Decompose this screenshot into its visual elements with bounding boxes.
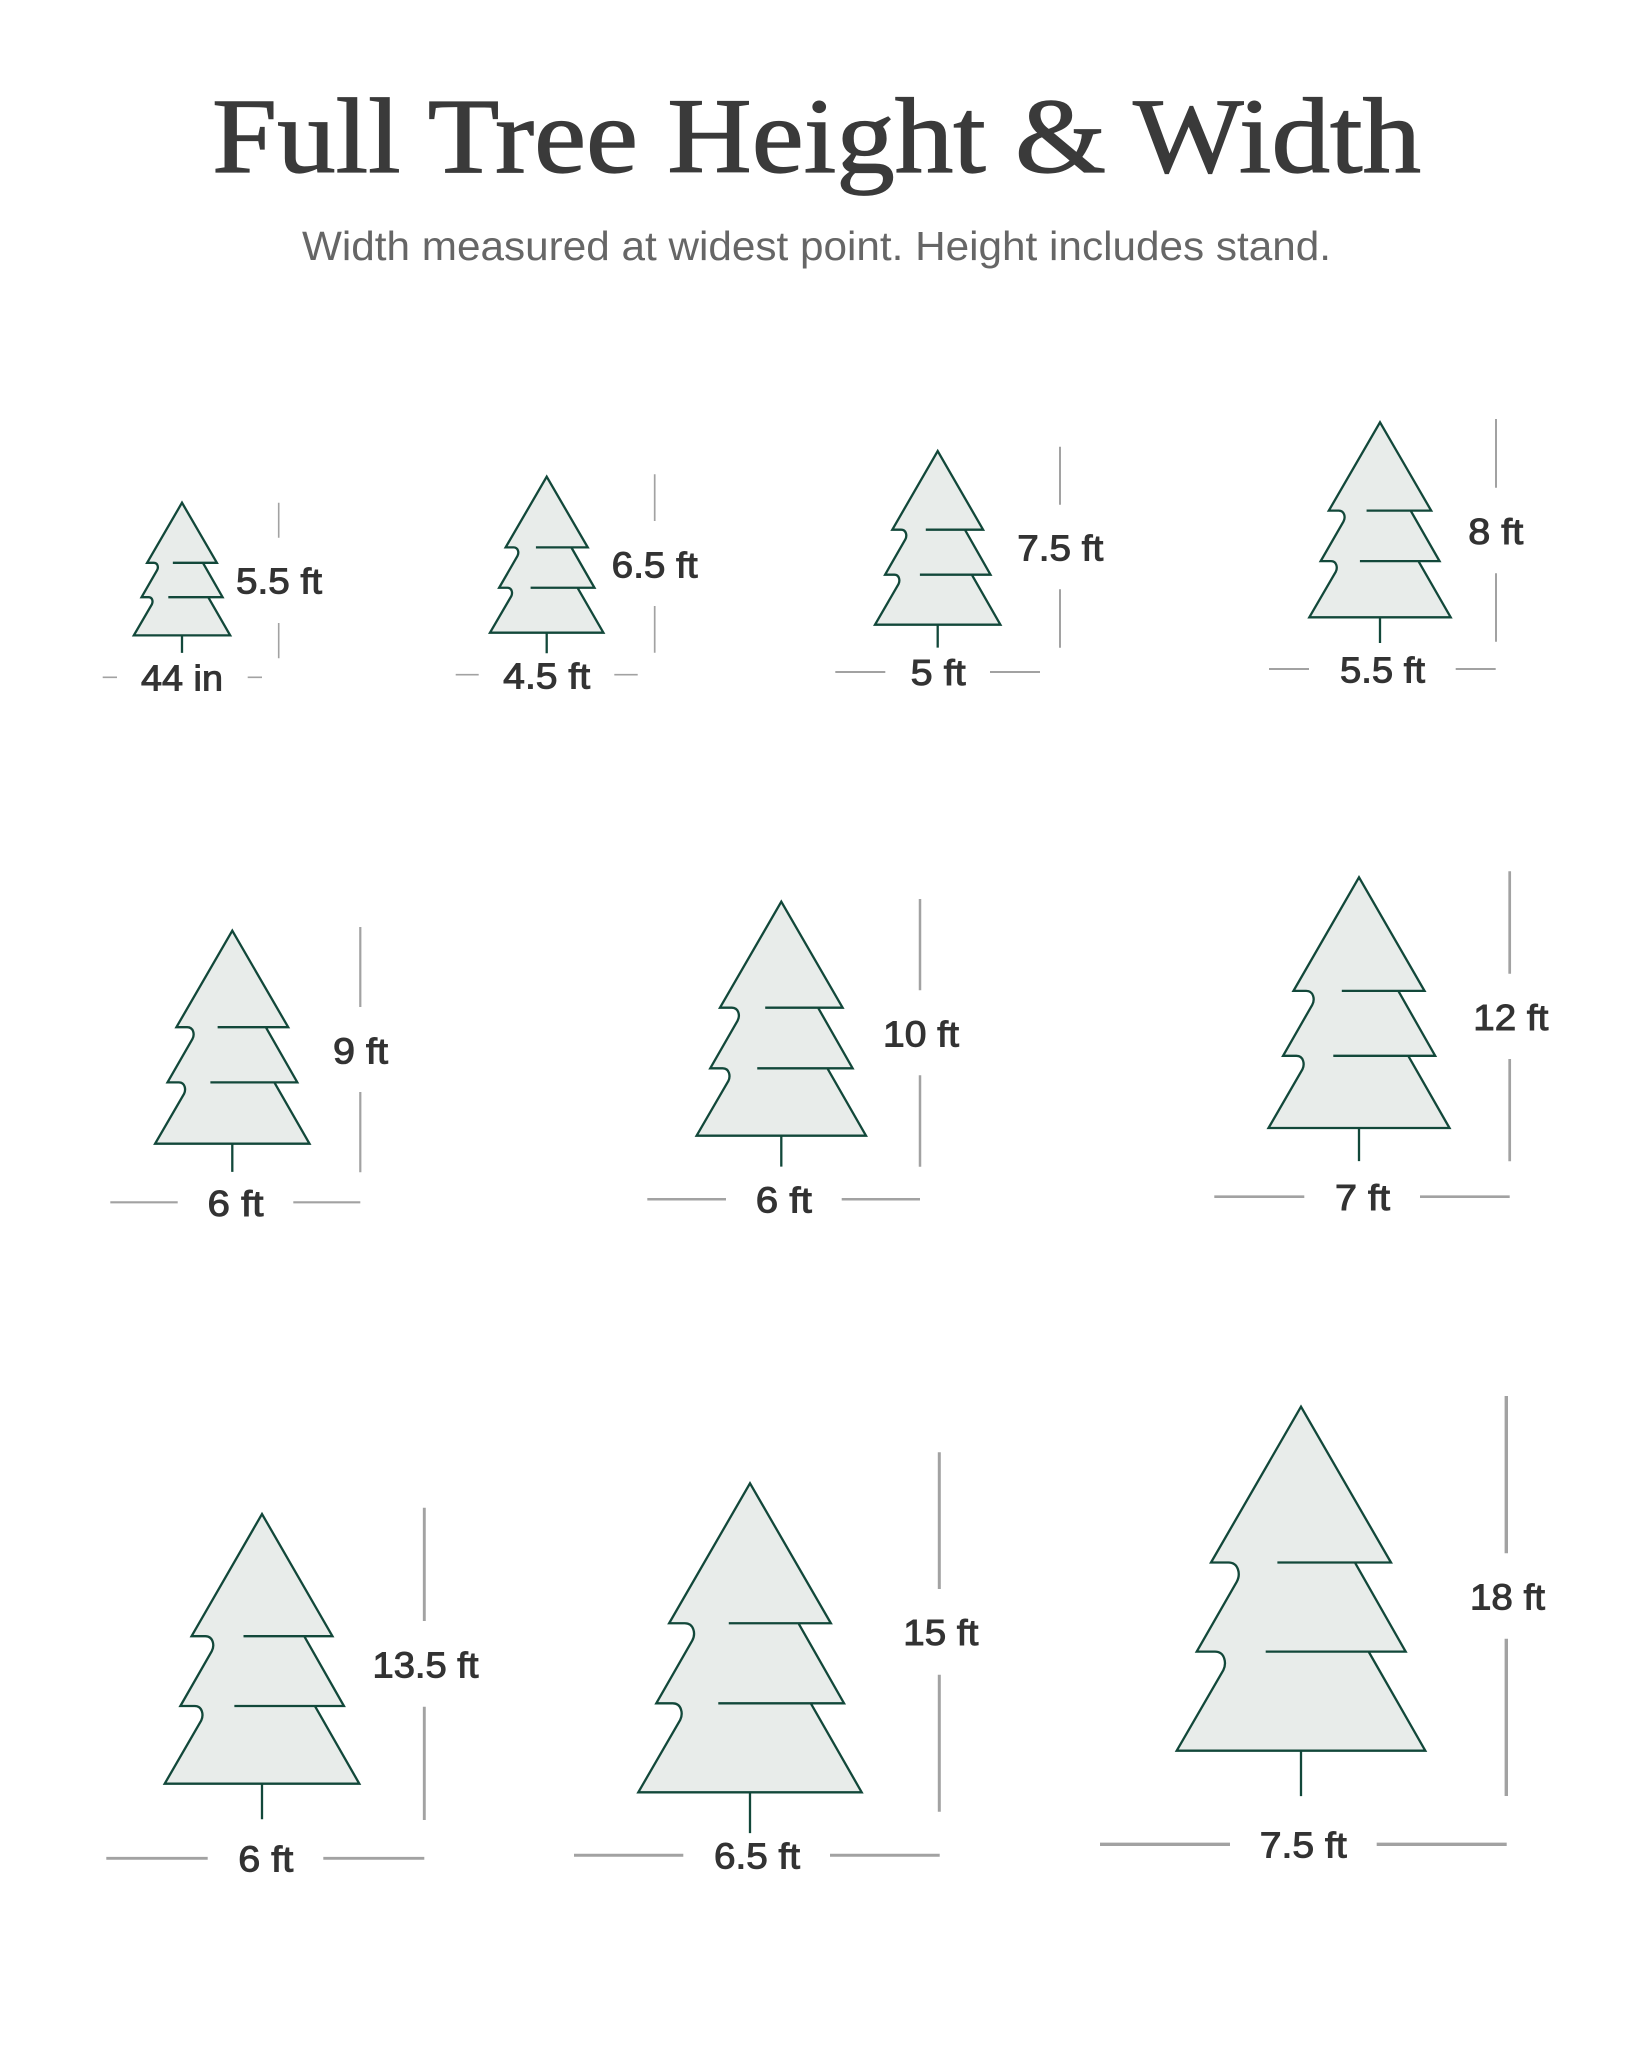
width line — [1214, 1195, 1510, 1198]
icon: tree — [697, 902, 866, 1167]
height label: 6.5 ft — [612, 544, 698, 585]
height line — [278, 503, 280, 658]
height line — [1505, 1396, 1508, 1796]
subtitle: Width measured at widest point. Height includes stand. — [302, 223, 1331, 269]
height line — [938, 1452, 941, 1812]
width label: 6 ft — [208, 1183, 264, 1224]
panel: tree 10 ft by 6 ft — [647, 899, 959, 1220]
height label: 10 ft — [883, 1014, 959, 1055]
height label: 9 ft — [333, 1030, 388, 1071]
width label: 6.5 ft — [714, 1835, 800, 1876]
icon: tree — [155, 931, 310, 1172]
icon: tree — [165, 1514, 359, 1819]
panel: tree 6.5 ft by 4.5 ft — [456, 474, 698, 696]
icon: tree — [875, 451, 1000, 648]
icon: tree — [1309, 422, 1451, 643]
width label: 44 in — [141, 658, 223, 699]
width line — [574, 1854, 940, 1857]
width label: 6 ft — [756, 1179, 812, 1220]
height line — [1495, 419, 1497, 642]
height line — [1508, 871, 1511, 1161]
width line — [103, 676, 262, 678]
width label: 5.5 ft — [1340, 650, 1425, 691]
icon: tree — [490, 477, 603, 653]
width line — [647, 1198, 920, 1201]
width label: 6 ft — [238, 1839, 293, 1880]
height label: 12 ft — [1473, 997, 1548, 1038]
height label: 15 ft — [903, 1612, 978, 1653]
width label: 5 ft — [911, 652, 966, 693]
width line — [1100, 1843, 1507, 1846]
icon: tree — [638, 1483, 862, 1833]
icon: tree — [1268, 877, 1450, 1161]
height line — [1059, 447, 1061, 648]
height label: 7.5 ft — [1017, 528, 1103, 569]
panel: tree 12 ft by 7 ft — [1214, 871, 1548, 1218]
height line — [423, 1508, 426, 1820]
icon: tree — [134, 503, 230, 653]
panel: tree 15 ft by 6.5 ft — [574, 1452, 978, 1876]
height label: 18 ft — [1470, 1576, 1545, 1617]
height line — [654, 474, 656, 653]
panel: tree 9 ft by 6 ft — [110, 927, 388, 1224]
width line — [1269, 668, 1496, 670]
width line — [456, 674, 638, 676]
width line — [110, 1201, 360, 1203]
height label: 13.5 ft — [372, 1644, 478, 1685]
height label: 5.5 ft — [236, 560, 322, 601]
height label: 8 ft — [1468, 511, 1523, 552]
panel: tree 13.5 ft by 6 ft — [106, 1508, 479, 1880]
icon: tree — [1177, 1407, 1425, 1796]
width label: 7.5 ft — [1260, 1825, 1347, 1866]
title: Full Tree Height & Width — [212, 78, 1421, 196]
height line — [919, 899, 921, 1167]
width label: 7 ft — [1335, 1177, 1390, 1218]
panel: tree 5.5 ft by 44 in — [103, 503, 322, 699]
height line — [359, 927, 361, 1172]
panel: tree 7.5 ft by 5 ft — [835, 447, 1103, 693]
width line — [835, 671, 1040, 673]
width line — [106, 1857, 424, 1860]
panel: tree 18 ft by 7.5 ft — [1100, 1396, 1545, 1866]
width label: 4.5 ft — [503, 655, 590, 696]
panel: tree 8 ft by 5.5 ft — [1269, 419, 1523, 691]
